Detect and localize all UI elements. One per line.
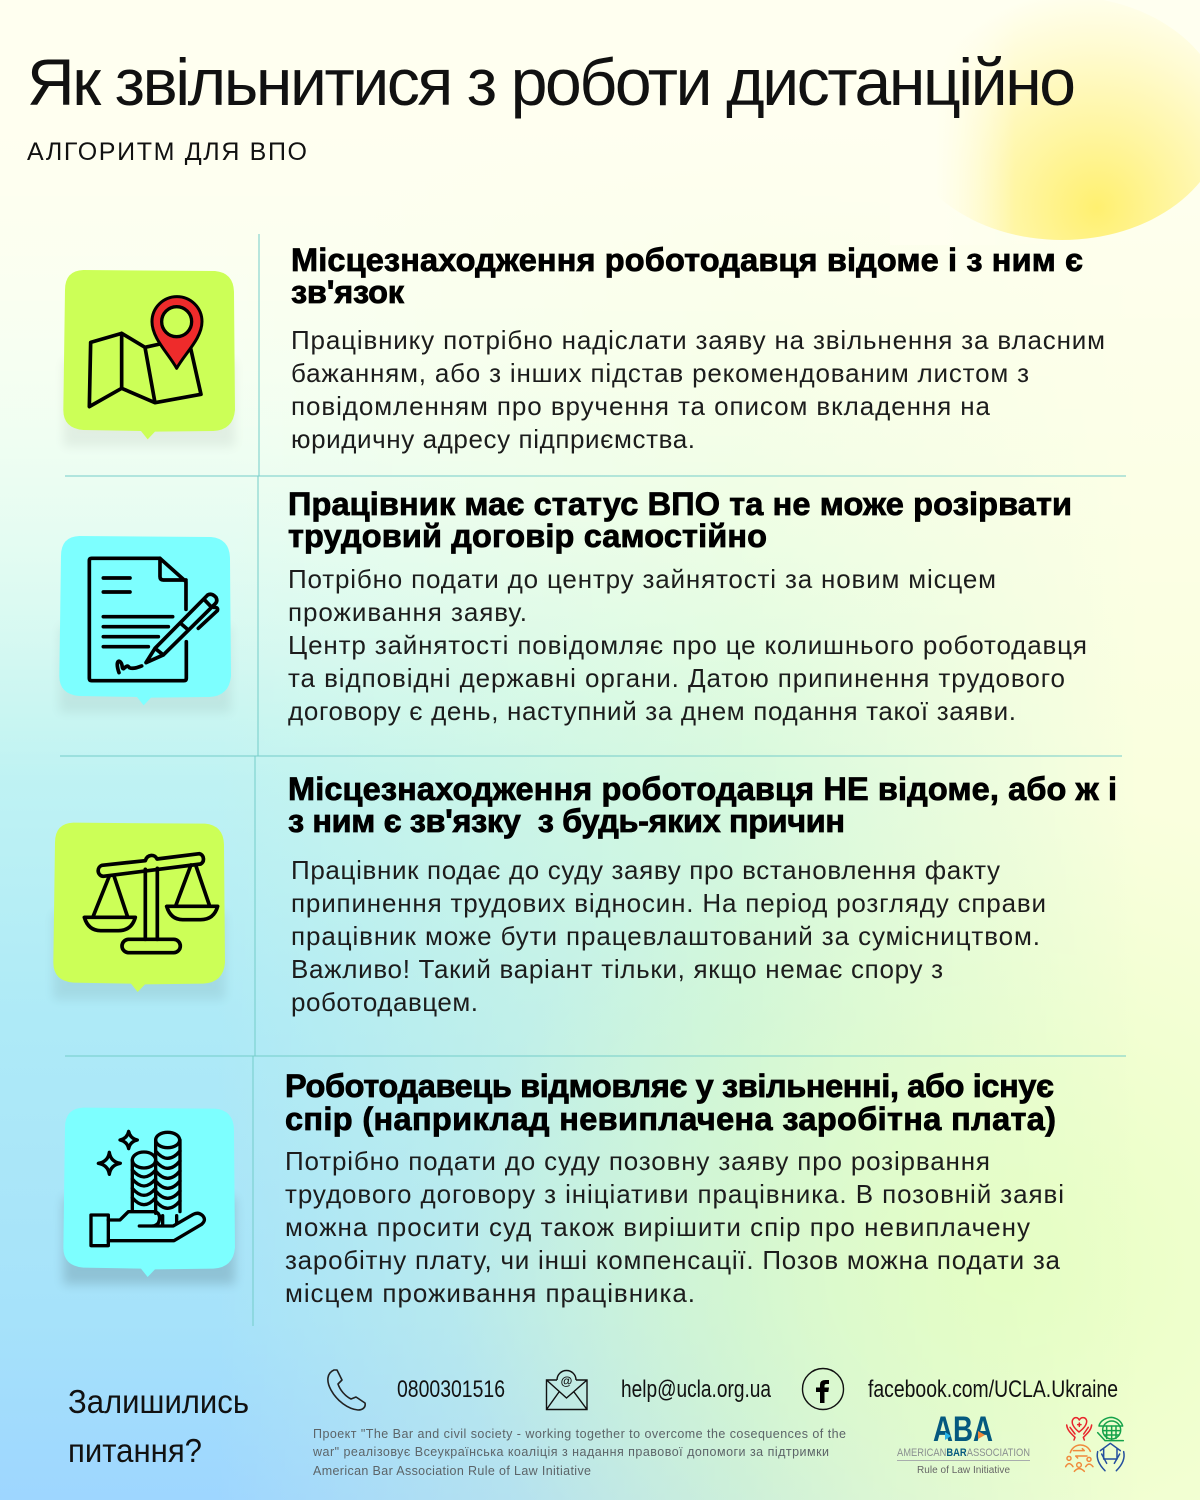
text block — [288, 564, 1087, 726]
text block: повідомленням про вручення та описом вкладення на — [291, 391, 991, 421]
heading: з ним є зв'язку з будь-яких причин — [288, 803, 845, 839]
text block: можна просити суд також вирішити спір про невиплачену — [285, 1212, 1030, 1242]
heading: Місцезнаходження роботодавця НЕ відоме, або ж і — [288, 771, 1117, 807]
heading: спір (наприклад невиплачена заробітна плата) — [285, 1101, 1056, 1137]
phone number: 0800301516 — [397, 1376, 505, 1403]
heading — [291, 242, 1083, 310]
heading: зв'язок — [291, 274, 405, 310]
text block: роботодавцем. — [291, 987, 478, 1017]
panel: employer location unknown — [53, 771, 1117, 1017]
icon: scales — [53, 823, 225, 999]
icon: document and pen — [59, 536, 231, 713]
heading: трудовий договір самостійно — [288, 518, 767, 554]
logo: American Bar Association: Rule of Law Initiative — [917, 1465, 1010, 1476]
panel: IDP status — [59, 486, 1087, 726]
icon: globe and helmet — [1098, 1417, 1123, 1441]
footer question: Залишились — [68, 1383, 249, 1420]
panel: employer refuses dismissal — [63, 1068, 1064, 1308]
heading: Працівник має статус ВПО та не може розірвати — [288, 486, 1072, 522]
heading — [288, 771, 1117, 839]
icon: hand with coins — [63, 1108, 235, 1284]
project note — [312, 1427, 846, 1478]
text block: працівник може бути працевлаштований за сумісництвом. — [291, 921, 1040, 951]
text block: трудового договору з ініціативи працівника. В позовній заяві — [285, 1179, 1064, 1209]
text block — [291, 325, 1105, 454]
decorative yellow glow — [890, 0, 1200, 245]
logo: American Bar Association — [897, 1410, 1030, 1476]
text block: Важливо! Такий варіант тільки, якщо немає спору з — [291, 954, 943, 984]
project note: Проект "The Bar and civil society - working together to overcome the cosequences of the — [313, 1427, 846, 1441]
text block: договору є день, наступний за днем подання такої заяви. — [288, 696, 1016, 726]
facebook link: facebook.com/UCLA.Ukraine — [868, 1376, 1118, 1403]
text block: припинення трудових відносин. На період розгляду справи — [291, 888, 1046, 918]
heading — [288, 486, 1072, 554]
text block: Працівник подає до суду заяву про встановлення факту — [291, 855, 1000, 885]
icon: map with pin — [63, 270, 235, 447]
text block — [291, 855, 1046, 1017]
text block: бажанням, або з інших підстав рекомендованим листом з — [291, 358, 1029, 388]
icon: envelope — [546, 1370, 587, 1410]
text block: Центр зайнятості повідомляє про це колишнього роботодавця — [288, 630, 1087, 660]
logo: coalition icons — [1066, 1417, 1124, 1471]
text block: Працівнику потрібно надіслати заяву на звільнення за власним — [291, 325, 1105, 355]
logo: American Bar Association: ABA — [933, 1410, 993, 1449]
logo: American Bar Association: AMERICANBARASSOCIATION — [897, 1447, 1030, 1459]
text block: Потрібно подати до суду позовну заяву про розірвання — [285, 1146, 990, 1176]
heading: Роботодавець відмовляє у звільненні, або існує — [285, 1068, 1054, 1104]
icon: facebook — [802, 1368, 844, 1410]
email: help@ucla.org.ua — [621, 1376, 772, 1403]
subtitle: АЛГОРИТМ ДЛЯ ВПО — [27, 138, 307, 166]
icon: envelope: @ — [561, 1374, 572, 1388]
project note: American Bar Association Rule of Law Initiative — [313, 1464, 591, 1478]
text block: юридичну адресу підприємства. — [291, 424, 695, 454]
icon: heart in hands — [1067, 1418, 1092, 1440]
panel: employer location known — [63, 242, 1105, 454]
title: Як звільнитися з роботи дистанційно — [27, 45, 1076, 119]
project note: war" реалізовує Всеукраїнська коаліція з надання правової допомоги за підтримки — [312, 1445, 829, 1459]
icon: people exchange — [1066, 1445, 1093, 1471]
footer question — [68, 1383, 249, 1469]
text block: проживання заяву. — [288, 597, 527, 627]
text block: заробітну плату, чи інші компенсації. Позов можна подати за — [285, 1245, 1061, 1275]
heading — [285, 1068, 1056, 1137]
text block: та відповідні державні органи. Датою припинення трудового — [288, 663, 1065, 693]
footer question: питання? — [68, 1432, 202, 1469]
text block: місцем проживання працівника. — [285, 1278, 695, 1308]
text block: Потрібно подати до центру зайнятості за новим місцем — [288, 564, 996, 594]
text block — [285, 1146, 1064, 1308]
icon: phone — [328, 1370, 365, 1410]
heading: Місцезнаходження роботодавця відоме і з ним є — [291, 242, 1083, 278]
icon: home in hands — [1097, 1443, 1124, 1471]
